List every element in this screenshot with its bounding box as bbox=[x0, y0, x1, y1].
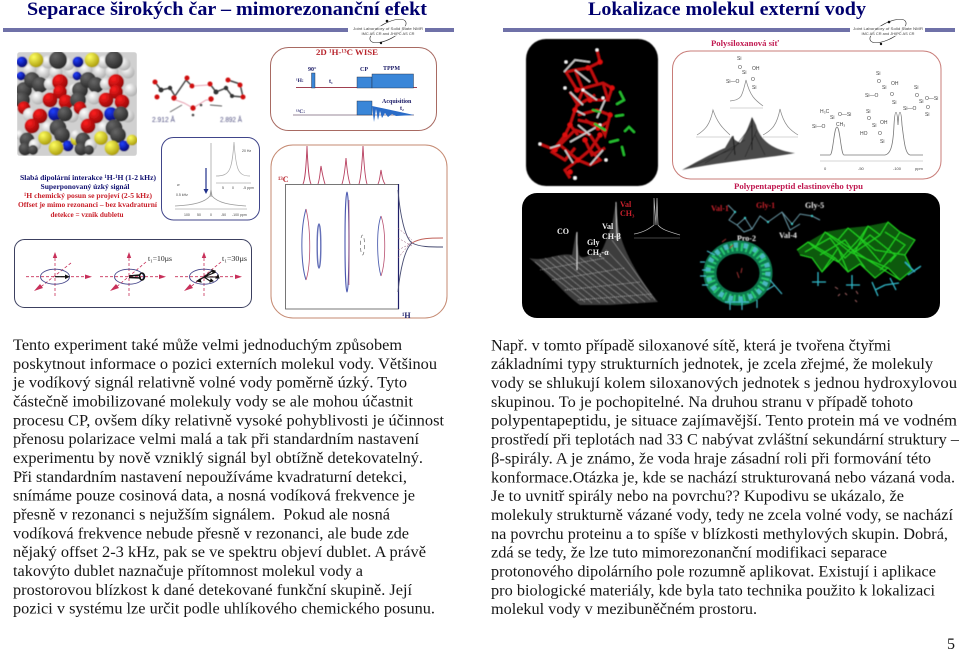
text block: right column: základními typy strukturních jednotek, je zcela zřejmé, že molekuly bbox=[491, 356, 933, 373]
silicon unit structures: Si bbox=[882, 85, 886, 91]
text block: left column: přenosu polarizace velmi malá a tak při standardním nastavení bbox=[13, 431, 420, 448]
vector diagram t=10: t₁=10µs bbox=[148, 254, 172, 263]
text block: left column: Při standardním nastavení nepoužíváme kvadraturní detekci, bbox=[13, 469, 407, 486]
panel: proton spectrum inset: 0.5 kHz bbox=[176, 193, 188, 197]
explanatory note: dipolar interaction: Offset je mimo rezonanci – bez kvadraturní bbox=[18, 200, 158, 209]
header rule and logo: right slide: Joint Laboratory of Solid State NMR bbox=[853, 26, 923, 31]
silicon unit structures: O bbox=[877, 79, 881, 85]
silicon unit structures: Si—O bbox=[903, 106, 916, 112]
header rule and logo: left slide bbox=[3, 15, 454, 47]
silicon unit structures: Si—O bbox=[726, 79, 739, 85]
small inset spectrum bbox=[634, 198, 680, 238]
peak labels: CH-β bbox=[602, 232, 621, 241]
peptide structure bbox=[711, 201, 824, 243]
silicon unit structures: Si bbox=[872, 123, 876, 129]
silicon unit structures: Si bbox=[830, 115, 834, 121]
peptide structure: Gly-5 bbox=[805, 201, 824, 210]
text block: left column: přesně v rezonanci s nejužším signálem. Pokud ale nosná bbox=[13, 506, 390, 524]
panel: 2D WISE pulse sequence: t₂ bbox=[400, 106, 404, 112]
1D silicon spectrum: -50 bbox=[858, 166, 865, 171]
peptide structure: Gly-1 bbox=[756, 201, 775, 210]
peak labels: Val bbox=[602, 222, 614, 231]
silicon unit structures: O bbox=[890, 92, 894, 98]
silicon unit structures: Si bbox=[737, 56, 741, 62]
text block: left column: Tento experiment také může velmi jednoduchým způsobem bbox=[13, 337, 403, 354]
text block: right column: β-spirály. A je známo, že voda hraje zásadní roli při formování této bbox=[491, 450, 931, 467]
green water molecules bbox=[593, 92, 634, 155]
text block: right column: zdá se tedy, že lze tuto mimorezonanční modifikaci separace bbox=[491, 545, 887, 562]
panel: proton spectrum inset: w bbox=[177, 183, 180, 187]
text block: right column: konformace.Otázka je, kde se nachází strukturovaná nebo vázaná voda. bbox=[491, 469, 955, 486]
header rule and logo: right slide bbox=[503, 15, 955, 47]
silica framework bonds bbox=[540, 50, 612, 178]
panel: polypentapeptide on black bbox=[522, 193, 940, 318]
panel: 2D WISE pulse sequence: t₁ bbox=[329, 79, 333, 85]
beta spiral ring bbox=[700, 239, 782, 310]
top carbon projection bbox=[303, 146, 385, 184]
panel: 2D WISE pulse sequence: 2D ¹H-¹³C WISE bbox=[316, 47, 378, 57]
peak labels bbox=[557, 200, 635, 257]
text block: left column: takovýto dublet naznačuje přítomnost molekul vody a bbox=[13, 563, 363, 580]
text block: left column: je vodíkový signál relativně volné vody poměrně úzký. Tyto bbox=[12, 375, 407, 392]
text block: right column: polypentapeptidu, je situace zajímavější. Tento protein má ve vodném bbox=[491, 413, 958, 430]
silicon unit structures: H₃C bbox=[820, 109, 830, 115]
panel: 2D HETCOR spectrum: ¹H bbox=[402, 311, 411, 320]
text block: left column: nějaký offset 2-3 kHz, pak se ve spektru objeví dublet. A právě bbox=[13, 544, 426, 561]
header rule and logo: left slide: IMC AS CR and JHIPC AS CR bbox=[362, 31, 415, 36]
panel: 2D WISE pulse sequence: ¹³C: bbox=[296, 109, 305, 115]
1D silicon spectrum: 0 bbox=[824, 166, 827, 171]
text block: right column: skupinou. To je pochopitelné. Na druhou stranu v případě tohoto bbox=[491, 394, 913, 411]
header rule and logo: right slide: IMC AS CR and JHIPC AS CR bbox=[862, 31, 915, 36]
panel: magnetisation vector diagrams bbox=[14, 240, 252, 308]
silicon unit structures: O bbox=[751, 77, 755, 83]
ball-and-stick water bridge molecule: 2.892 Å bbox=[220, 115, 242, 124]
panel: proton spectrum inset: 0 bbox=[210, 213, 212, 217]
side proton projection bbox=[398, 190, 412, 292]
silicon unit structures: O bbox=[867, 116, 871, 122]
header rule and logo: left slide: Joint Laboratory of Solid State NMR bbox=[353, 26, 423, 31]
text block: left column: vodíková frekvence nebude přesně v rezonanci, ale bude zde bbox=[13, 525, 409, 542]
peptide structure: Val-4 bbox=[779, 231, 797, 240]
text block: right column: molekuly strukturně vázané vody, tedy ne zcela volné vody, se nachází bbox=[491, 507, 954, 524]
silicon unit structures: Si bbox=[752, 85, 756, 91]
beta spiral side view bbox=[797, 222, 921, 302]
panel: polysiloxane spectra bbox=[672, 51, 941, 179]
explanatory note: dipolar interaction: Superponovaný úzký signál bbox=[40, 182, 130, 191]
text block: right column: Např. v tomto případě siloxanové sítě, která je tvořena čtyřmi bbox=[491, 337, 892, 354]
panel: 2D WISE pulse sequence: ¹H: bbox=[296, 78, 304, 84]
silicon unit structures: Si bbox=[876, 71, 880, 77]
panel: 2D WISE pulse sequence: 90° bbox=[308, 66, 317, 73]
peak labels: CO bbox=[557, 227, 569, 236]
silicon unit structures: OH bbox=[752, 66, 760, 72]
panel: proton spectrum inset: 100 bbox=[184, 213, 190, 217]
silicon unit structures: CH₃ bbox=[836, 122, 845, 128]
text block: left column: experimentu by nově vzniklý signál byl obtížně detekovatelný. bbox=[13, 450, 423, 467]
text block: left column: prostorovou blízkost k dané detekované funkční skupině. Její bbox=[13, 582, 413, 599]
peak labels: CH₃ bbox=[620, 209, 635, 218]
silicon unit structures: Si bbox=[914, 85, 918, 91]
silicon unit structures: O—Si bbox=[838, 112, 851, 118]
explanatory note: dipolar interaction: detekce = vznik dubletu bbox=[50, 210, 124, 219]
silicon unit structures: Si—O bbox=[812, 124, 825, 130]
silicon unit structures: Si bbox=[892, 100, 896, 106]
silicon unit structures: HO bbox=[860, 131, 868, 137]
space-filling molecular model bbox=[14, 51, 138, 156]
explanatory note: dipolar interaction bbox=[18, 173, 158, 219]
text block: left column: částečně imobilizované molekuly vody se ale mohou účastnit bbox=[13, 394, 414, 410]
panel: 2D HETCOR spectrum bbox=[271, 145, 447, 320]
heading: polypentapeptide: Polypentapeptid elastinového typu bbox=[734, 181, 863, 191]
peak labels: Gly bbox=[587, 238, 599, 247]
vector diagram t=30 bbox=[175, 252, 247, 296]
panel: proton spectrum inset: -100 ppm bbox=[232, 213, 247, 217]
1D silicon spectrum: ppm bbox=[915, 166, 923, 171]
panel: 2D WISE pulse sequence: Acquisition bbox=[382, 99, 412, 105]
silicon unit structures: Si bbox=[919, 99, 923, 105]
silicon unit structures: O bbox=[878, 131, 882, 137]
peptide structure: Val-1 bbox=[711, 204, 729, 213]
text block: right column: protonového dipolárního pole rozumně aplikovat. Existují i aplikace bbox=[491, 564, 936, 580]
panel: proton spectrum inset: 0 bbox=[232, 186, 234, 190]
silicon unit structures: Si bbox=[742, 70, 746, 76]
panel: 2D HETCOR spectrum: ¹³C bbox=[278, 175, 289, 184]
ball-and-stick water bridge molecule: 2.912 Å bbox=[152, 115, 175, 124]
text block: right column: na povrchu proteinu a to spíše v blízkosti methylových skupin. Dobrá, bbox=[491, 526, 948, 543]
panel: 2D WISE pulse sequence: CP bbox=[360, 67, 368, 73]
heading: polysiloxane network: Polysiloxanová síť bbox=[711, 38, 780, 48]
panel: proton spectrum inset: -50 bbox=[221, 213, 226, 217]
contour plot frame bbox=[286, 184, 398, 309]
silicon unit structures bbox=[726, 56, 938, 145]
vector diagram t=10 bbox=[100, 252, 172, 296]
silicon unit structures: O bbox=[926, 105, 930, 111]
panel: 2D WISE pulse sequence: TPPM bbox=[383, 66, 400, 72]
panel: proton spectrum inset: 50 bbox=[197, 213, 201, 217]
vector diagram t=0 bbox=[26, 252, 92, 296]
3D carbon spectrum bbox=[529, 202, 658, 305]
peak labels: Val bbox=[620, 200, 632, 209]
text block: right column bbox=[491, 337, 959, 618]
panel: silica cluster on black bbox=[526, 39, 658, 186]
text block: right column: pro biologické materiály, kde byla tato technika použito k lokalizaci bbox=[491, 582, 936, 599]
explanatory note: dipolar interaction: Slabá dipolární interakce ¹H-¹H (1-2 kHz) bbox=[20, 173, 156, 182]
peak labels: CH₂-α bbox=[587, 248, 609, 257]
silicon unit structures: O bbox=[738, 65, 742, 71]
panel: proton spectrum inset: 20 Hz bbox=[242, 149, 251, 153]
silicon unit structures: O bbox=[915, 93, 919, 99]
silicon unit structures: Si bbox=[925, 112, 929, 118]
panel: proton spectrum inset bbox=[162, 138, 260, 220]
vector diagram t=30: t₁=30µs bbox=[222, 254, 247, 263]
silicon unit structures: OH bbox=[891, 81, 899, 87]
text block: right column: prostředí při teplotách nad 33 C nabývat zvláštní sekundární struktury – bbox=[491, 432, 959, 449]
explanatory note: dipolar interaction: ¹H chemický posun se projeví (2-5 kHz) bbox=[24, 191, 152, 200]
text block: left column: procesu CP, ovšem díky relativně vysoké pohyblivosti je účinnost bbox=[13, 412, 445, 429]
text block: left column: pozici v systému lze určit podle uhlíkového chemického posunu. bbox=[13, 601, 435, 618]
1D silicon spectrum: -100 bbox=[893, 166, 902, 171]
1D silicon spectrum bbox=[820, 112, 923, 171]
text block: right column: molekul vody v mezibuněčném prostoru. bbox=[491, 601, 757, 618]
panel: proton spectrum inset: -5 ppm bbox=[243, 186, 254, 190]
text block: right column: vody se shlukují kolem siloxanových jednotek s jednou hydroxylovou bbox=[491, 375, 957, 392]
silicon unit structures: Si bbox=[866, 109, 870, 115]
silicon unit structures: Si—O bbox=[865, 93, 878, 99]
ball-and-stick water bridge molecule bbox=[152, 76, 246, 124]
text block: left column: poskytnout informace o pozici externích molekul vody. Většinou bbox=[13, 356, 437, 373]
silicon unit structures: OH bbox=[880, 120, 888, 126]
text block: left column bbox=[12, 337, 445, 618]
panel: proton spectrum inset: 5 bbox=[222, 186, 224, 190]
panel: 2D WISE pulse sequence bbox=[270, 47, 436, 130]
text block: right column: Je to uvnitř spirály nebo na povrchu?? Kupodivu se ukázalo, že bbox=[491, 488, 904, 505]
silicon unit structures: O—Si bbox=[925, 96, 938, 102]
silicon unit structures: Si bbox=[880, 139, 884, 145]
peptide structure: Pro-2 bbox=[737, 234, 756, 243]
3D spectrum surface bbox=[682, 117, 795, 170]
text block: left column: snímáme pouze cosinová data, a nosná vodíková frekvence je bbox=[13, 488, 415, 505]
